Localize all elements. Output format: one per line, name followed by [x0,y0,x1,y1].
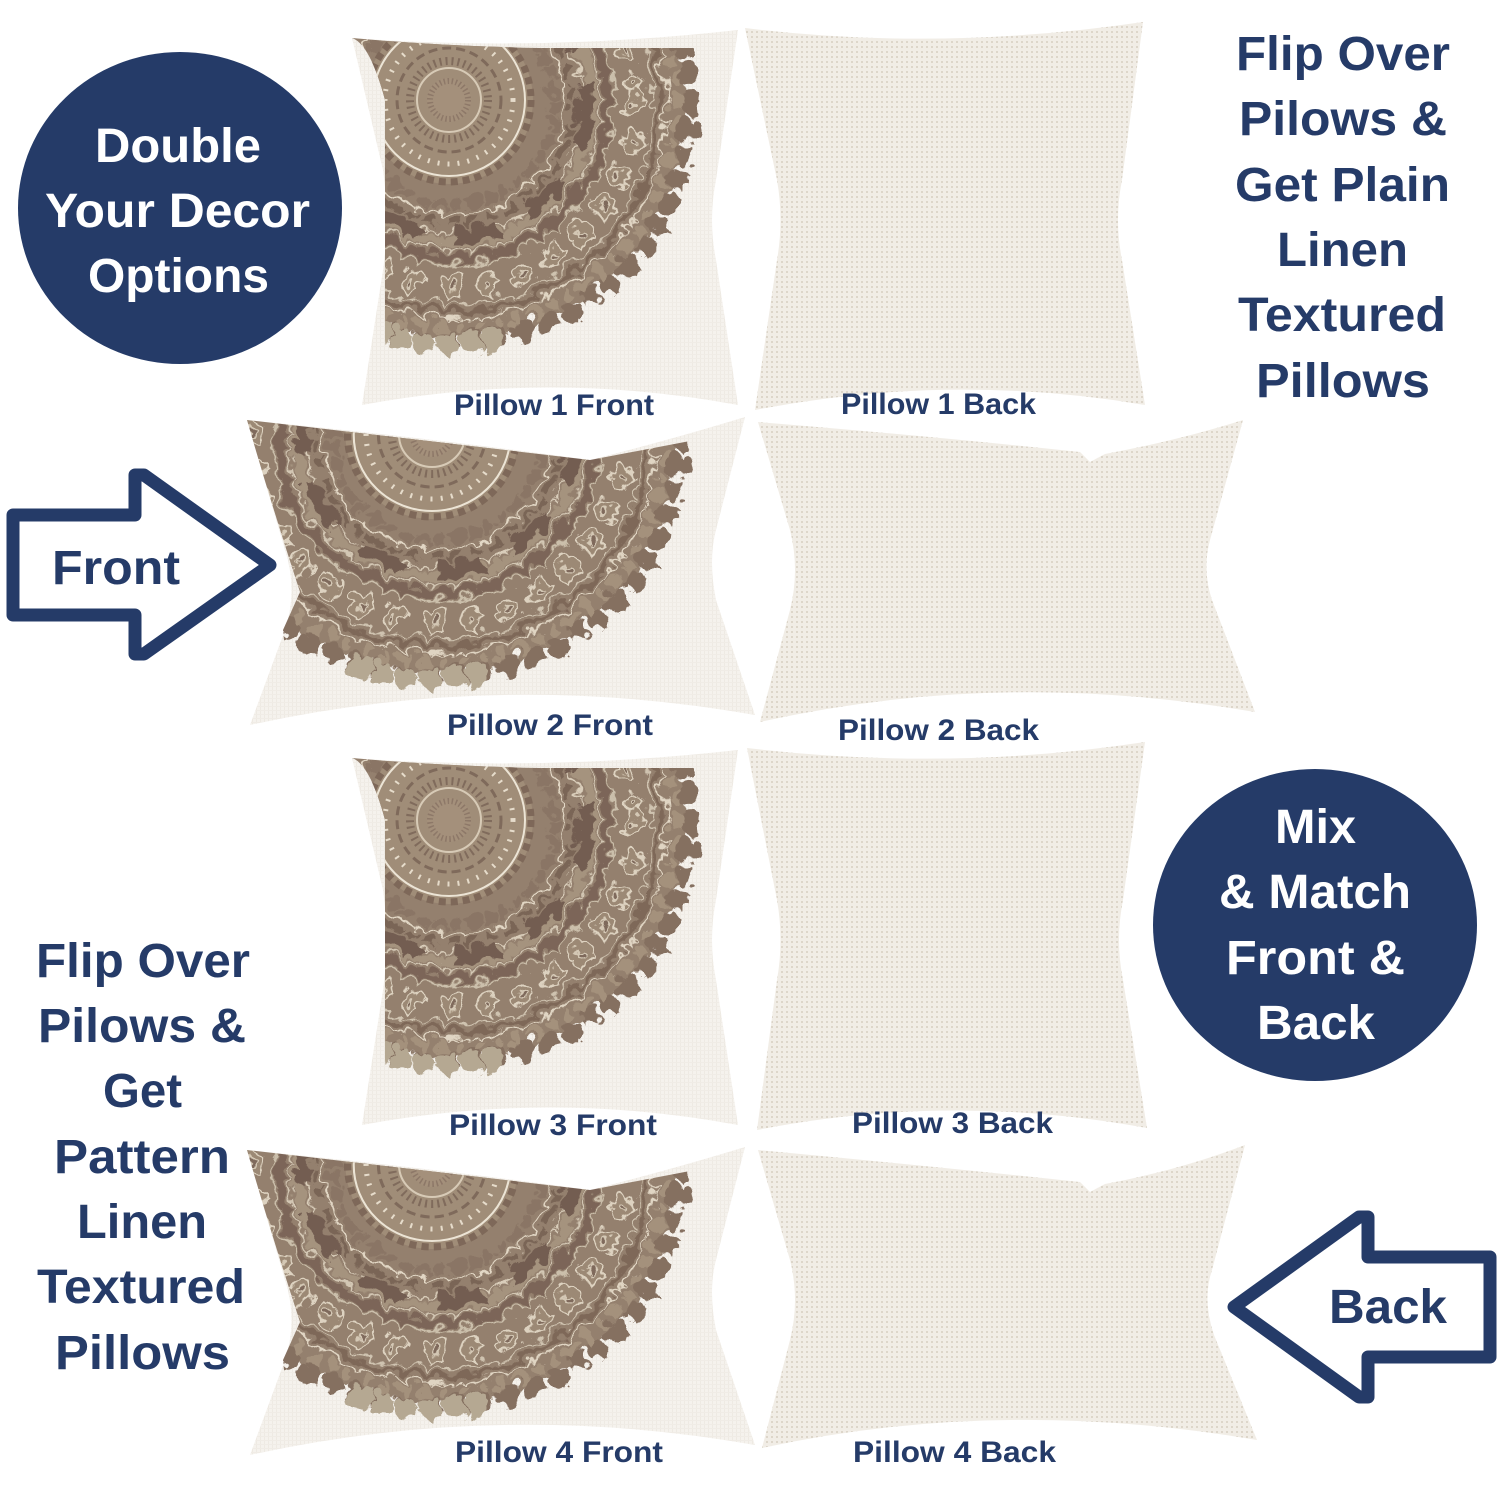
caption: pillow 4 back: Pillow 4 Back [853,1436,1056,1469]
pillow 3 back [747,742,1147,1130]
heading: pattern linen: Pilows & [38,1000,246,1053]
heading: plain linen: Linen [1277,224,1408,277]
badge: mix and match: Back [1257,997,1375,1050]
heading: plain linen: Pilows & [1239,93,1447,146]
caption: pillow 3 back: Pillow 3 Back [852,1107,1053,1140]
badge: double your decor options [18,52,342,364]
caption: pillow 1 back: Pillow 1 Back [841,388,1036,421]
badge: double your decor options: Your Decor [45,185,310,238]
heading: pattern linen: Pattern [54,1131,230,1184]
badge: double your decor options: Double [95,120,261,173]
heading: pattern linen: Linen [77,1196,207,1249]
pillow 2 front [247,417,755,725]
badge: mix and match [1153,769,1477,1081]
heading: pattern linen: Pillows [55,1327,230,1380]
arrow: front: Front [52,542,180,595]
badge: mix and match: & Match [1219,866,1411,919]
pillow 4 back [758,1145,1257,1448]
heading: plain linen: Textured [1238,289,1446,342]
heading: plain linen: Pillows [1256,355,1430,408]
heading: plain linen [1235,28,1450,408]
caption: pillow 3 front: Pillow 3 Front [449,1109,657,1142]
pillow 1 front [352,30,738,405]
pillow 3 front [352,750,738,1125]
arrow: back [1234,1217,1490,1397]
badge: mix and match: Front & [1226,932,1405,985]
pillow 2 back [758,420,1255,722]
caption: pillow 1 front: Pillow 1 Front [454,389,654,422]
badge: mix and match: Mix [1275,801,1356,854]
heading: pattern linen: Flip Over [36,935,250,988]
heading: plain linen: Get Plain [1235,159,1450,212]
pillow 4 front [247,1147,755,1455]
heading: pattern linen: Get [103,1065,182,1118]
heading: plain linen: Flip Over [1236,28,1450,81]
caption: pillow 2 back: Pillow 2 Back [838,714,1039,747]
arrow: front [13,475,270,654]
pillow 1 back [745,22,1145,410]
heading: pattern linen: Textured [37,1261,245,1314]
caption: pillow 2 front: Pillow 2 Front [447,709,653,742]
arrow: back: Back [1329,1281,1447,1334]
badge: double your decor options: Options [88,250,269,303]
caption: pillow 4 front: Pillow 4 Front [455,1436,663,1469]
heading: pattern linen [36,935,250,1380]
